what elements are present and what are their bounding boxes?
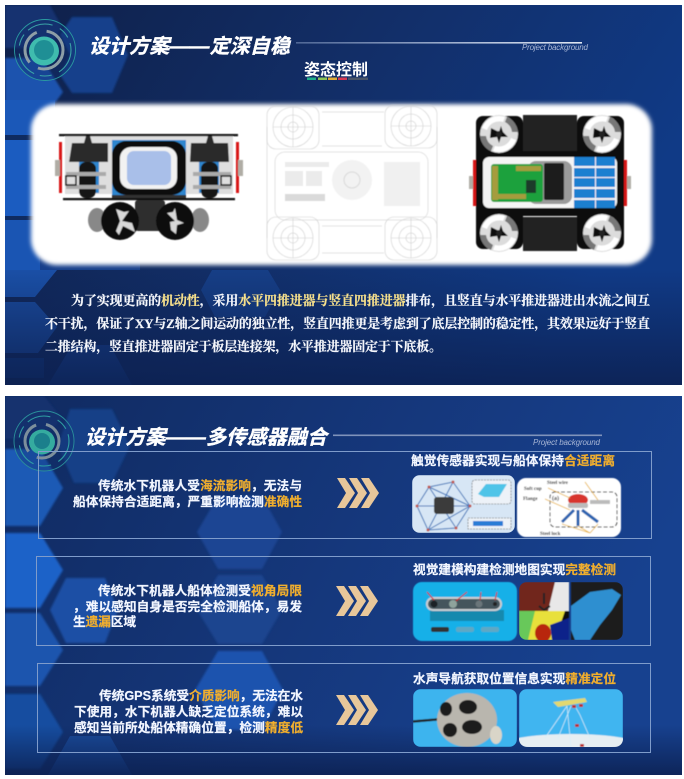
solution heading: 触觉传感器实现与船体保持合适距离	[411, 453, 615, 468]
image: soft cup sensor: (a)	[552, 495, 559, 502]
row frame	[38, 452, 652, 538]
image: acoustic transducer	[413, 689, 517, 747]
image: frame robot	[412, 475, 515, 533]
problem text: ，难以感知自身是否完全检测船体，易发	[73, 599, 302, 614]
diagram: robot top view with electronics	[469, 115, 631, 252]
text block: attitude control description: 二推结构，竖直推进器固定于板层连接架，水平推进器固定于下底板。	[45, 339, 442, 355]
icon: lens emblem, slide 2	[14, 411, 74, 471]
problem text: 下使用，水下机器人缺乏定位系统，难以	[74, 704, 303, 719]
problem text	[73, 478, 302, 509]
diagram: robot front view	[55, 134, 243, 240]
image: soft cup sensor	[517, 478, 621, 537]
image: soft cup sensor: Soft cup	[524, 487, 542, 492]
image: soft cup sensor: Steel wire	[547, 481, 569, 486]
panel: white image panel	[31, 104, 652, 265]
diagram: wireframe top view	[267, 105, 437, 260]
title rule, slide 2	[333, 434, 602, 436]
caption: project background, slide 2: Project background	[533, 438, 601, 447]
problem text: 生遗漏区域	[73, 614, 136, 629]
image: depth camera	[413, 582, 517, 641]
row frame	[38, 664, 650, 752]
row frame	[36, 556, 650, 646]
title: slide 1: 设计方案——定深自稳	[89, 35, 292, 58]
title: slide 2: 设计方案——多传感器融合	[85, 426, 330, 449]
row 2: visual mapping	[36, 556, 650, 646]
text block: attitude control description: 为了实现更高的机动性，采用水平四推进器与竖直四推进器排布，且竖直与水平推进器进出水流之间互	[71, 293, 650, 309]
row 3: acoustic navigation	[38, 664, 650, 752]
caption: project background, slide 1: Project background	[522, 43, 589, 52]
arrow: chevrons	[336, 586, 378, 616]
text block: attitude control description: 不干扰，保证了XY与Z轴之间运动的独立性，竖直四推更是考虑到了底层控制的稳定性，其效果远好于竖直	[45, 316, 650, 332]
icon: lens emblem, slide 1	[14, 20, 76, 80]
title rule, slide 1	[296, 42, 582, 44]
problem text: 传统水下机器人船体检测受视角局限	[98, 583, 302, 598]
solution heading: 视觉建模构建检测地图实现完整检测	[413, 562, 616, 577]
slide 2 background	[5, 396, 682, 775]
image: soft cup sensor: Flange	[523, 497, 538, 502]
solution heading: 水声导航获取位置信息实现精准定位	[413, 671, 616, 686]
problem text	[73, 583, 302, 629]
image: hull map	[519, 582, 623, 642]
arrow: chevrons	[336, 695, 378, 725]
problem text: 船体保持合适距离，严重影响检测准确性	[73, 494, 302, 509]
problem text	[74, 688, 303, 735]
arrow: chevrons	[337, 478, 379, 508]
problem text: 感知当前所处船体精确位置，检测精度低	[74, 720, 303, 735]
text block: attitude control description	[45, 293, 650, 355]
slide 1 background	[5, 5, 682, 385]
problem text: 传统水下机器人受海流影响，无法与	[98, 478, 302, 493]
image: soft cup sensor: Steel lock	[540, 532, 561, 537]
row 1: tactile sensing	[38, 452, 652, 538]
problem text: 传统GPS系统受介质影响，无法在水	[99, 688, 303, 703]
image: underwater vehicle positioning	[519, 689, 623, 747]
subheading: attitude control: 姿态控制	[304, 60, 368, 79]
